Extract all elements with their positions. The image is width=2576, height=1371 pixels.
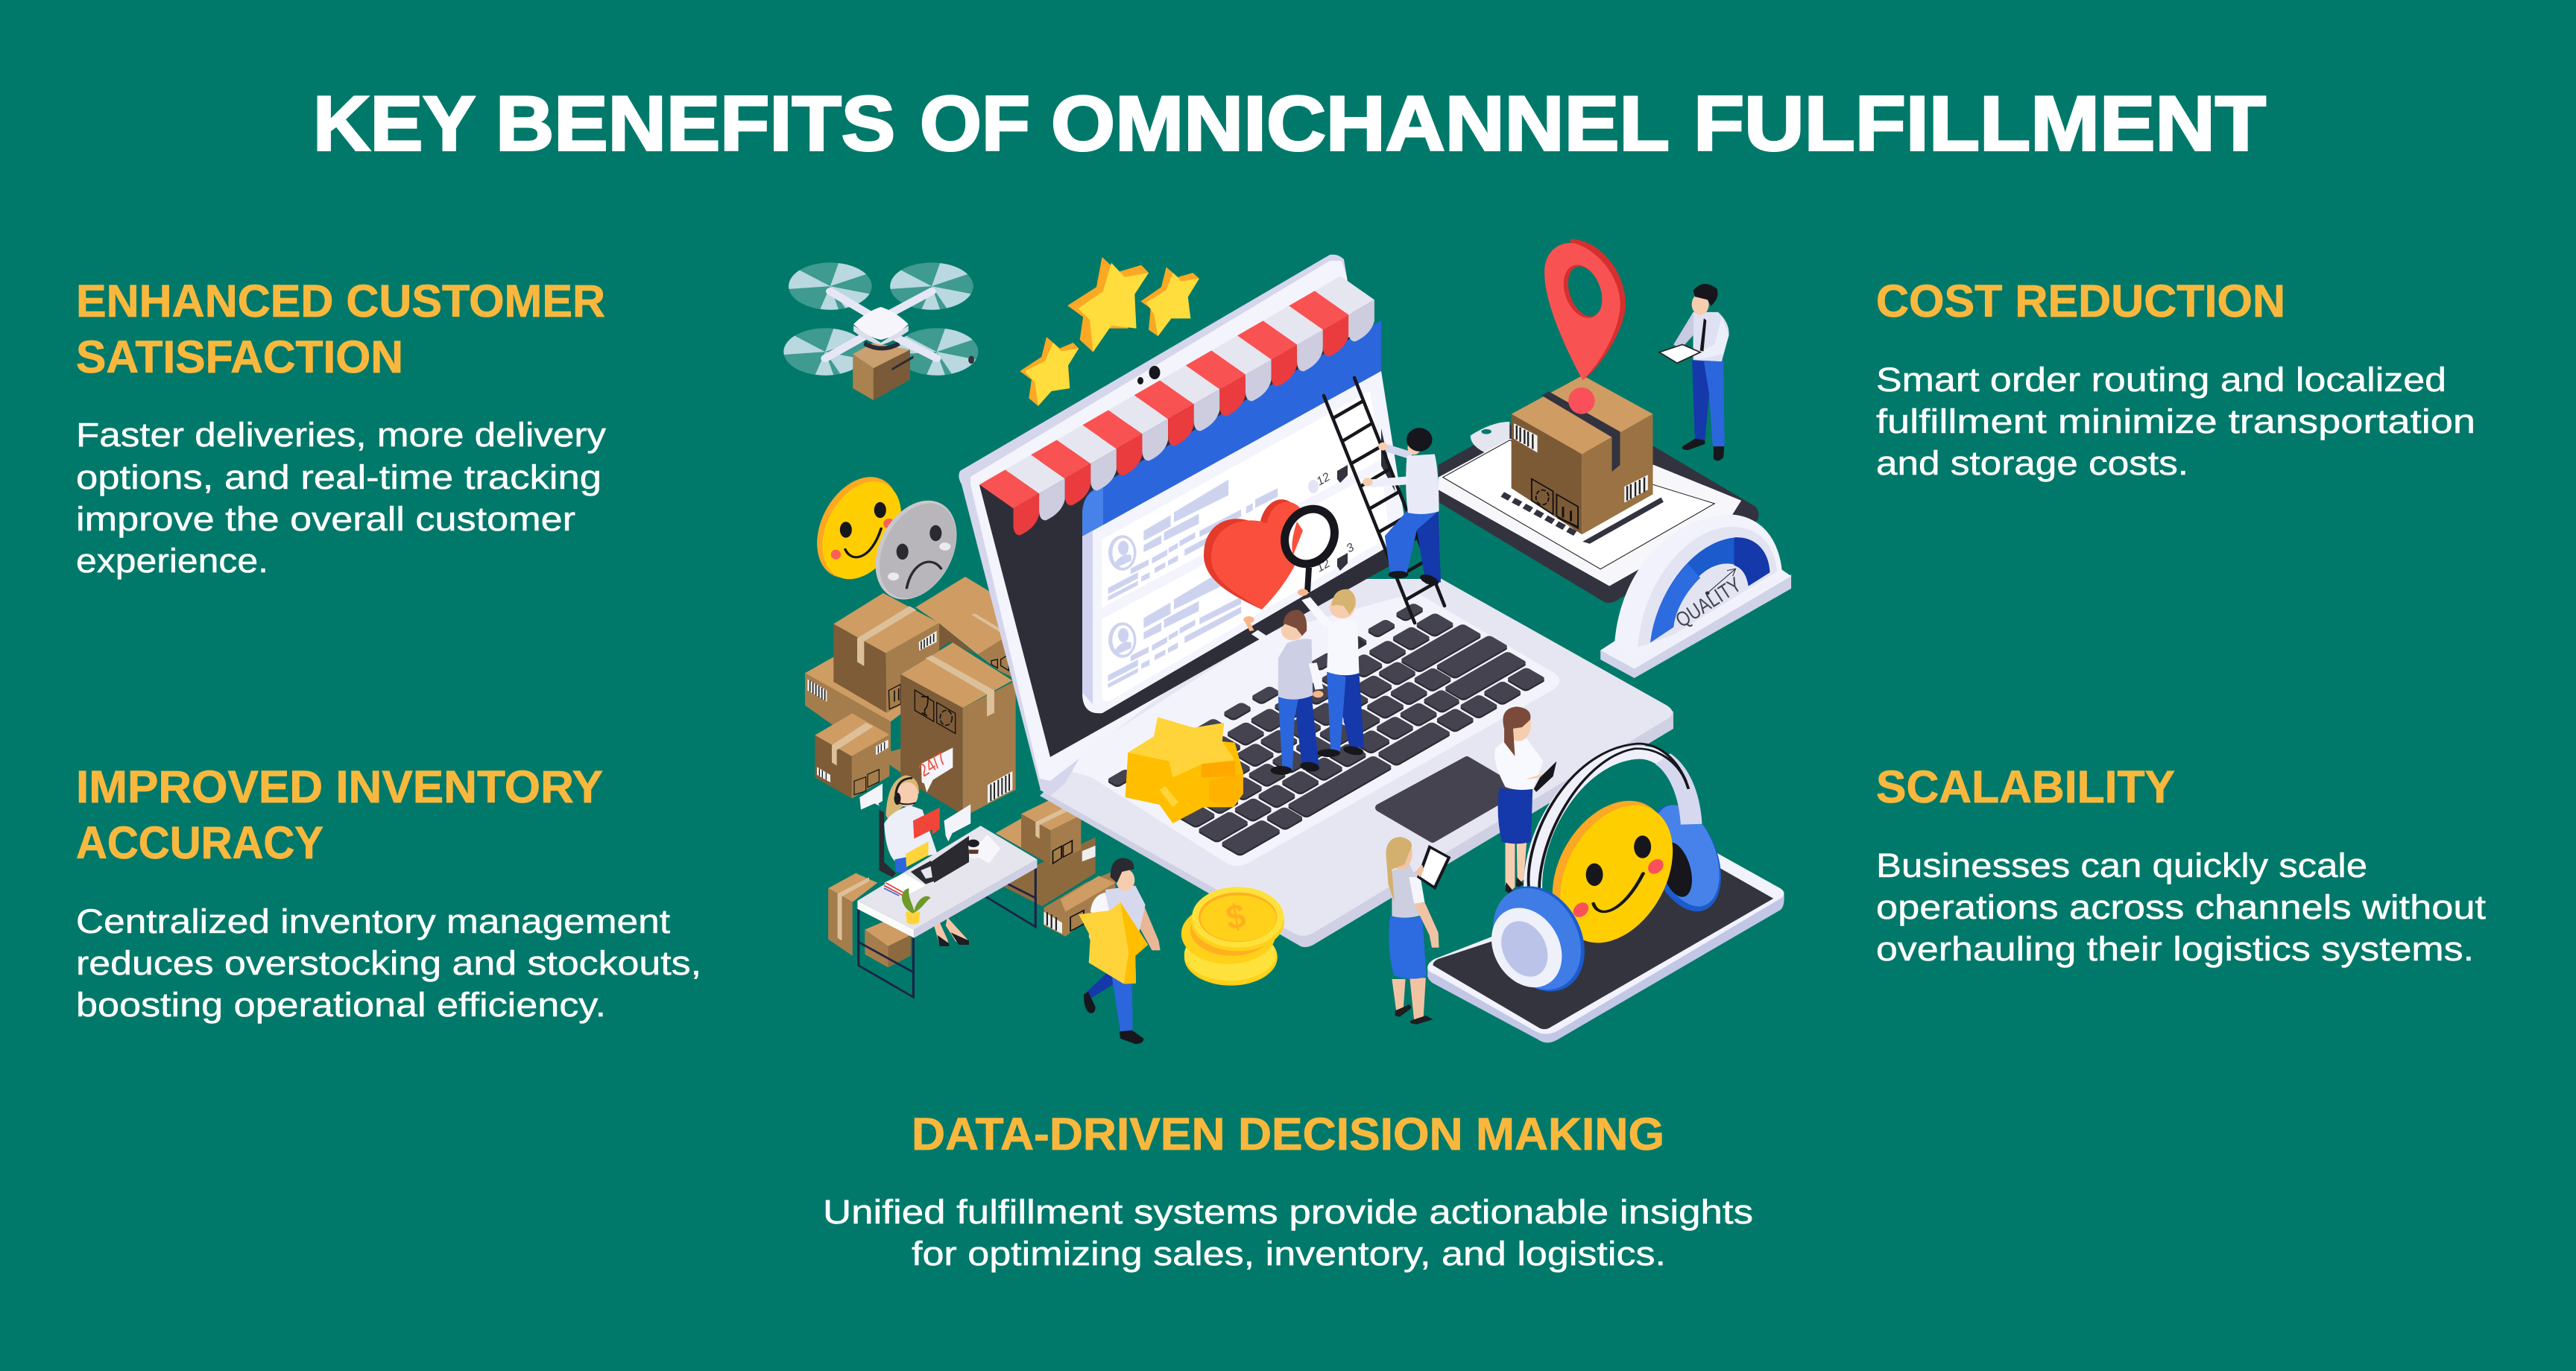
speech bubble 24/7 [921, 747, 953, 792]
heading: ACCURACY [76, 817, 323, 868]
body text: boosting operational efficiency. [76, 986, 606, 1024]
body text: options, and real-time tracking [76, 458, 602, 496]
rating stars [1020, 257, 1199, 406]
body text: Businesses can quickly scale [1876, 846, 2367, 884]
upper left box [833, 593, 939, 713]
body text: experience. [76, 542, 268, 580]
heart [1204, 499, 1306, 609]
laptop base [1040, 579, 1673, 947]
laptop lid [959, 255, 1405, 796]
heading: SCALABILITY [1876, 762, 2175, 812]
phone with headphone smiley [1427, 744, 1784, 1042]
panel: scalability [1876, 762, 2487, 968]
people on keyboard [1243, 589, 1366, 775]
smiley [1532, 792, 1692, 952]
heading: SATISFACTION [76, 332, 403, 382]
phone [1427, 851, 1784, 1042]
title: OF [920, 80, 1030, 167]
keyboard [1106, 597, 1555, 858]
desk [857, 826, 1037, 997]
body text [1876, 846, 2487, 968]
title: FULFILLMENT [1693, 80, 2266, 167]
body text [1876, 361, 2475, 482]
dollar sign: $ [1223, 896, 1248, 937]
body text: fulfillment minimize transportation [1876, 402, 2475, 440]
stack of stars on keyboard [1126, 717, 1243, 823]
heading: DATA-DRIVEN DECISION MAKING [912, 1109, 1664, 1159]
speech bubble [859, 784, 883, 810]
boxes by desk [828, 799, 1115, 967]
right ear cup [1635, 800, 1733, 916]
body text [823, 1193, 1753, 1273]
blond man [1298, 589, 1366, 757]
body text: overhauling their logistics systems. [1876, 930, 2474, 968]
heading: ENHANCED CUSTOMER [76, 276, 605, 326]
man with tablet [1659, 284, 1729, 460]
reactions: like and comment counters [1308, 465, 1357, 574]
heading: COST REDUCTION [1876, 276, 2285, 326]
panel: cost reduction [1876, 276, 2475, 482]
body text: Centralized inventory management [76, 902, 671, 940]
woman with white tablet [1386, 837, 1449, 1025]
store awning [979, 276, 1374, 535]
wide box [805, 657, 900, 773]
body text: improve the overall customer [76, 500, 575, 538]
back box [915, 577, 1026, 678]
title: BENEFITS [496, 80, 895, 167]
gold coin stack [1181, 887, 1284, 986]
body text: Faster deliveries, more delivery [76, 416, 607, 454]
touchpad [1379, 760, 1518, 839]
ladder [1324, 378, 1445, 623]
drone with parcel [783, 262, 978, 400]
reactions: like and comment counters: 3 [1345, 541, 1357, 555]
reactions: like and comment counters: 12 [1315, 557, 1333, 574]
call-centre agent at desk [879, 775, 970, 946]
panel: enhanced customer satisfaction [76, 276, 607, 580]
body text: Unified fulfillment systems provide actionable insights [823, 1193, 1753, 1231]
headband [1529, 744, 1691, 904]
body text: reduces overstocking and stockouts, [76, 944, 701, 982]
magnifying glass [1275, 500, 1344, 592]
heading [76, 276, 605, 382]
title [313, 80, 2266, 167]
reactions: like and comment counters: 12 [1315, 471, 1333, 488]
left ear cup [1480, 880, 1597, 997]
body text: operations across channels without [1876, 888, 2487, 926]
gauge label: QUALITY [1671, 573, 1746, 632]
small box [815, 713, 889, 799]
title: OMNICHANNEL [1051, 80, 1670, 167]
brown-haired man [1243, 609, 1324, 775]
body text: Smart order routing and localized [1876, 361, 2446, 399]
laptop [959, 255, 1673, 947]
24/7 label: 24/7 [915, 749, 950, 781]
body text: and storage costs. [1876, 444, 2188, 482]
man climbing ladder [1363, 428, 1441, 587]
clipboard with parcel and location pin [1439, 239, 1759, 603]
title: KEY [313, 80, 476, 167]
panel: improved inventory accuracy [76, 762, 701, 1024]
body text [76, 902, 701, 1024]
body text [76, 416, 607, 580]
panel: data-driven decision making [823, 1109, 1753, 1273]
man carrying star [1079, 858, 1161, 1044]
heading: IMPROVED INVENTORY [76, 762, 603, 812]
woman with black tablet [1494, 706, 1556, 893]
emoji faces: happy and sad [802, 467, 971, 609]
cardboard box stack [805, 577, 1026, 817]
heading [76, 762, 603, 868]
tall box [900, 642, 1016, 817]
webcam [1137, 366, 1160, 384]
quality gauge [1600, 514, 1791, 678]
body text: for optimizing sales, inventory, and logistics. [912, 1235, 1666, 1273]
illustration: isometric omnichannel laptop scene [783, 239, 1791, 1044]
